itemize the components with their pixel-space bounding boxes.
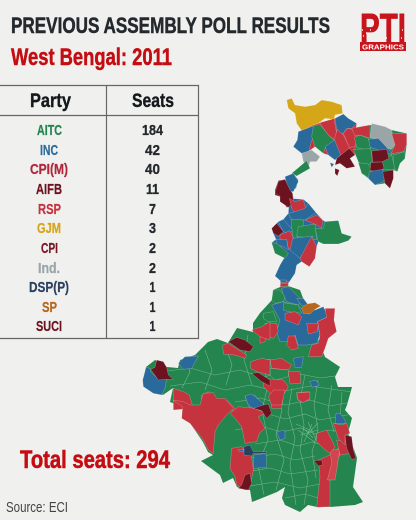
row: AITC: AITC	[37, 123, 62, 139]
results table	[0, 86, 198, 338]
row: GJM	[37, 220, 156, 237]
map: south base	[143, 285, 363, 512]
row: AIFB: AIFB	[36, 182, 62, 198]
source note: Source: ECI	[6, 499, 68, 516]
row: AIFB: 11	[146, 181, 159, 198]
row: RSP: 7	[149, 201, 156, 218]
row: INC	[40, 142, 160, 159]
row: CPI: 2	[149, 240, 156, 257]
constituency map of West Bengal	[143, 98, 407, 512]
map: central districts	[272, 173, 352, 286]
row: SP: 1	[150, 299, 156, 316]
row: Ind.: 2	[149, 260, 156, 277]
row: SP	[42, 299, 156, 316]
row: CPI(M)	[30, 161, 160, 178]
map: southern districts	[173, 390, 356, 507]
row: SUCI	[36, 318, 156, 335]
row: CPI: CPI	[41, 241, 58, 257]
subtitle: West Bengal: 2011	[11, 44, 172, 71]
row: AIFB	[36, 181, 159, 198]
total seats callout: Total seats: 294	[20, 446, 170, 474]
row: GJM: 3	[149, 220, 156, 237]
row: SP: SP	[42, 300, 57, 316]
row: AITC	[37, 122, 164, 139]
icon: PTI Graphics logo: GRAPHICS	[362, 42, 404, 52]
map: upper south districts	[260, 280, 337, 408]
row: CPI(M): 40	[145, 161, 160, 178]
row: DSP(P)	[29, 279, 156, 296]
row: INC: 42	[145, 142, 160, 159]
row: DSP(P): DSP(P)	[29, 280, 69, 296]
row: SUCI: 1	[150, 318, 156, 335]
map: north districts	[275, 98, 407, 207]
table header: seats: Seats	[132, 91, 174, 112]
row: INC: INC	[40, 143, 58, 159]
row: RSP	[38, 201, 156, 218]
row: Ind.: Ind.	[38, 261, 60, 277]
row: SUCI: SUCI	[36, 319, 62, 335]
row: CPI	[41, 240, 156, 257]
map: western districts	[143, 322, 270, 412]
row: RSP: RSP	[38, 202, 61, 218]
title: PREVIOUS ASSEMBLY POLL RESULTS	[11, 13, 330, 38]
row: AITC: 184	[142, 122, 164, 139]
row: DSP(P): 1	[150, 279, 156, 296]
table header: party: Party	[30, 91, 71, 112]
row: Ind.	[38, 260, 156, 277]
row: CPI(M): CPI(M)	[30, 162, 68, 178]
row: GJM: GJM	[37, 221, 61, 237]
